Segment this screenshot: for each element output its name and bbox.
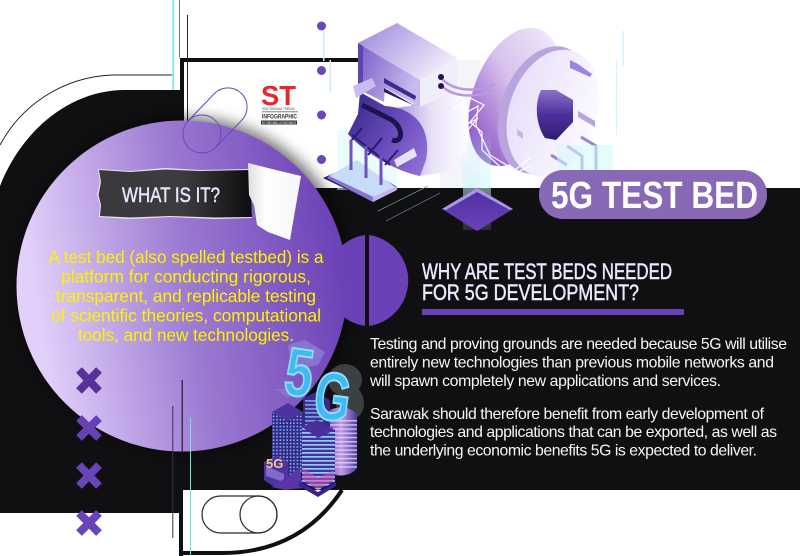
heading band: what is it: WHAT IS IT? xyxy=(122,184,220,207)
wires between numerals xyxy=(438,74,495,95)
icon: connector dots xyxy=(317,22,331,164)
pale glass behind circuits xyxy=(440,60,480,188)
text block: definition: platform for conducting rigorous, xyxy=(61,266,311,286)
3D 5G letters: G xyxy=(310,357,356,437)
capsule outline icon xyxy=(183,88,247,153)
heading underline bar xyxy=(422,309,684,315)
platform base under 5 xyxy=(323,160,397,202)
logo: ST infographic: BY MICHAEL KONCHAKIS xyxy=(262,121,297,125)
text block: explanation: entirely new technologies than previous mobile networks and xyxy=(370,354,774,372)
glass panel right xyxy=(557,145,613,170)
icon: four purple crosses xyxy=(79,370,99,533)
illustration: isometric 5G xyxy=(323,15,624,231)
heading: why are test beds needed xyxy=(422,259,672,305)
text block: definition: of scientific theories, computational xyxy=(51,306,321,326)
text block: explanation xyxy=(369,336,787,460)
text block: definition: transparent, and replicable testing xyxy=(56,286,316,306)
cylinder tower xyxy=(325,408,357,476)
numeral 5 xyxy=(348,23,469,185)
left tower xyxy=(272,389,303,480)
logo: ST infographic: ST xyxy=(261,80,296,111)
light beam xyxy=(463,130,491,230)
text block: explanation: will spawn completely new applications and services. xyxy=(369,373,721,390)
icon: toggle outline xyxy=(202,496,277,533)
text block: explanation: technologies and applications that can be exported, as well as xyxy=(370,424,777,441)
text block: definition xyxy=(48,247,324,345)
small building: 5G xyxy=(266,456,283,471)
back tower xyxy=(303,392,330,440)
illustration: 5G smart city xyxy=(264,333,364,497)
title pill: 5G TEST BED: 5G TEST BED xyxy=(551,175,758,217)
small building xyxy=(264,456,303,490)
3D 5G letters: 5 xyxy=(280,333,318,412)
circuit lines xyxy=(452,98,532,178)
torn paper curl xyxy=(248,163,301,240)
heading: why are test beds needed: FOR 5G DEVELOPMENT? xyxy=(422,280,639,305)
front tower xyxy=(299,420,336,497)
numeral G ring xyxy=(451,15,615,188)
logo: ST infographic: INFOGRAPHIC xyxy=(262,114,298,120)
shadow of purple circle xyxy=(19,117,353,451)
split half circle behind heading xyxy=(326,235,408,326)
text block: explanation: Sarawak should therefore benefit from early development of xyxy=(370,406,765,423)
3D 5G letters xyxy=(280,333,356,437)
heading: why are test beds needed: WHY ARE TEST BEDS NEEDED xyxy=(422,259,672,284)
logo: ST infographic xyxy=(261,80,298,125)
dark line accents on circle xyxy=(172,380,191,556)
text block: explanation: the underlying economic benefits 5G is expected to deliver. xyxy=(370,442,757,460)
glass panel left xyxy=(337,130,397,190)
ghost shapes behind letters xyxy=(288,340,364,420)
text block: definition: A test bed (also spelled testbed) is a xyxy=(48,247,324,267)
text block: definition: tools, and new technologies. xyxy=(78,325,294,345)
panel: what is it purple circle xyxy=(16,120,348,452)
outline arc and vertical lines, top left xyxy=(0,0,188,145)
diamond base xyxy=(442,188,513,231)
heading band: what is it xyxy=(97,168,252,219)
logo: ST infographic: NEW SARAWAK TRIBUNE xyxy=(262,107,296,111)
text block: explanation: Testing and proving grounds are needed because 5G will utilise xyxy=(370,336,787,353)
